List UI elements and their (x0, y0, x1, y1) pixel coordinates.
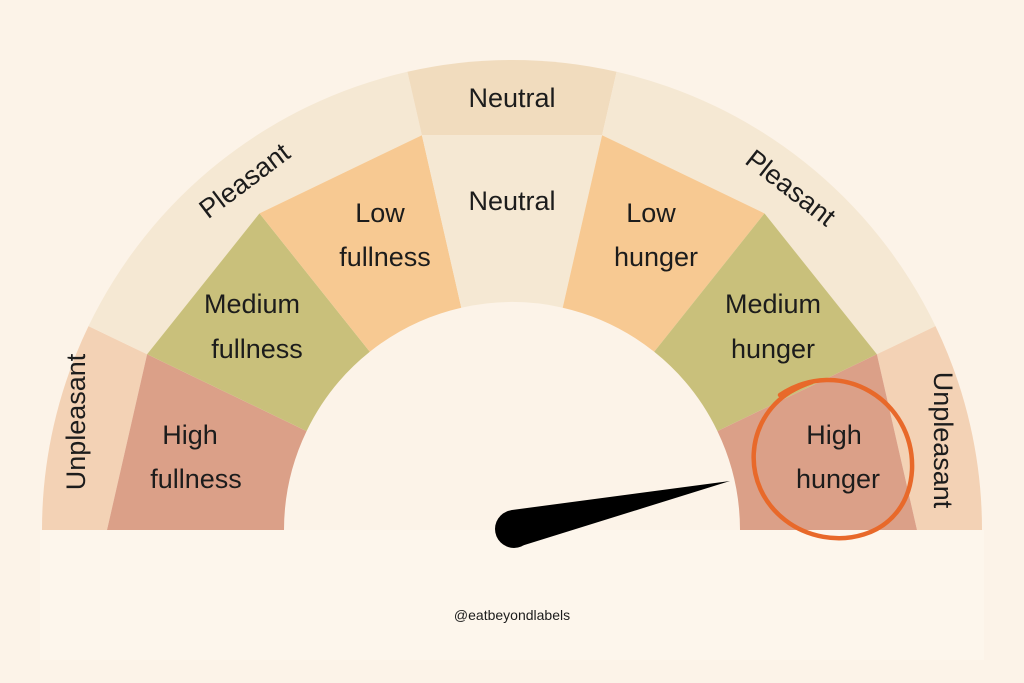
segment: high fullness (107, 354, 307, 530)
label: medium hunger: hunger (731, 334, 815, 364)
label: pleasant left: Pleasant (194, 137, 296, 224)
label: high fullness: High (162, 420, 218, 450)
label: low fullness: fullness (339, 242, 431, 272)
segment: neutral (422, 135, 602, 308)
inner labels (150, 186, 880, 494)
outer: neutral (407, 60, 617, 135)
label: unpleasant right: Unpleasant (928, 372, 958, 509)
label: medium fullness: fullness (211, 334, 303, 364)
segment: medium hunger (654, 213, 877, 431)
label: neutral inner: Neutral (468, 186, 556, 216)
watermark: @eatbeyondlabels (454, 607, 570, 623)
label: low hunger: hunger (614, 242, 698, 272)
orange circle highlight (754, 380, 912, 538)
label: high hunger: High (806, 420, 862, 450)
outer: unpleasant right (877, 326, 982, 530)
outer labels (61, 83, 958, 509)
label: high hunger: hunger (796, 464, 880, 494)
label: medium hunger: Medium (725, 289, 821, 319)
label: low fullness: Low (355, 198, 405, 228)
outer ring (42, 60, 982, 530)
segment: low hunger (563, 135, 764, 352)
outer: pleasant left (88, 72, 422, 354)
needle (495, 481, 730, 548)
segment: low fullness (260, 135, 461, 352)
segment: high hunger (717, 354, 917, 530)
label: low hunger: Low (626, 198, 676, 228)
label: high fullness: fullness (150, 464, 242, 494)
outer: unpleasant left (42, 326, 147, 530)
label: neutral outer: Neutral (468, 83, 556, 113)
outer: pleasant right (602, 72, 936, 354)
label: unpleasant left: Unpleasant (61, 353, 91, 490)
label: medium fullness: Medium (204, 289, 300, 319)
label: pleasant right: Pleasant (740, 144, 842, 232)
segment: medium fullness (147, 213, 370, 431)
inner ring segments (107, 135, 917, 530)
